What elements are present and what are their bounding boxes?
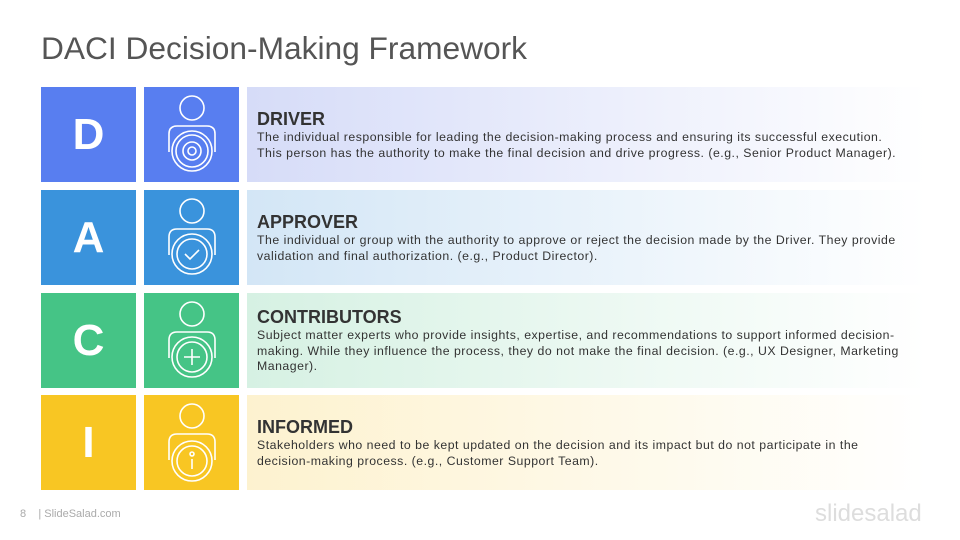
letter C — [41, 293, 136, 388]
letter C: C — [73, 316, 104, 364]
panel text: Stakeholders who need to be kept updated on the decision and its impact but do not participate in the decision-making process. (e.g., Customer Support Team). — [257, 438, 859, 468]
letter D: D — [73, 110, 104, 158]
logo: slidesalad — [815, 500, 922, 527]
panel text: CONTRIBUTORS — [257, 307, 402, 327]
letter D — [41, 87, 136, 182]
panel text — [247, 293, 927, 388]
panel text: The individual responsible for leading the decision-making process and ensuring its successful execution. This person has the authority to make the final decision and drive progress. (e.g., Senior Product Manager). — [257, 130, 896, 160]
title: DACI Decision-Making Framework — [41, 30, 527, 66]
panel text: APPROVER — [257, 212, 358, 232]
row: approver — [41, 190, 896, 285]
icon: person gear — [144, 87, 239, 182]
row: contributors — [41, 293, 899, 388]
letter I — [41, 395, 136, 490]
letter I: I — [82, 418, 95, 466]
panel text: DRIVER — [257, 109, 325, 129]
letter A — [41, 190, 136, 285]
icon: person plus — [144, 293, 239, 388]
icon: person info — [144, 395, 239, 490]
panel text: INFORMED — [257, 417, 353, 437]
icon: person check — [144, 190, 239, 285]
row: driver — [41, 87, 896, 182]
panel text: Subject matter experts who provide insights, expertise, and recommendations to support informed decision-making. While they influence the process, they do not make the final decision. (e.g., UX Designer, Marketing Manager). — [257, 328, 899, 373]
panel text — [247, 190, 927, 285]
letter A: A — [73, 212, 104, 262]
footer: 8 | SlideSalad.com — [20, 508, 121, 520]
panel text — [247, 87, 927, 182]
panel text — [247, 395, 927, 490]
panel text: The individual or group with the authority to approve or reject the decision made by the Driver. They provide validation and final authorization. (e.g., Product Director). — [257, 233, 896, 262]
row: informed — [41, 395, 859, 490]
